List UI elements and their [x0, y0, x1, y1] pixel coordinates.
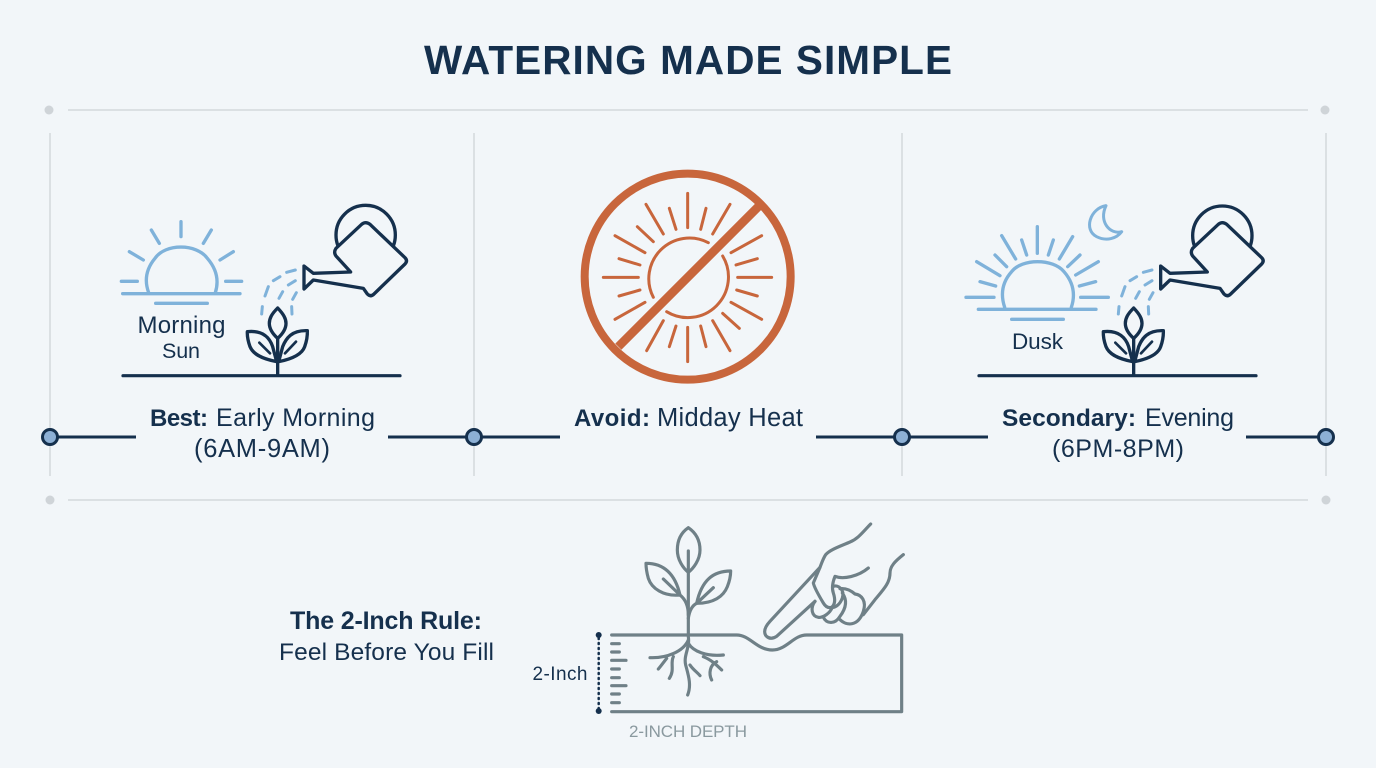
ground line: [979, 374, 1256, 377]
icon: watering can: [304, 205, 406, 296]
heading: 2-inch rule: [279, 607, 494, 666]
text: best time: Early Morning: [216, 404, 375, 432]
icon: crescent moon: [1090, 206, 1122, 239]
label: 2-inch depth: 2-INCH DEPTH: [629, 722, 747, 741]
icon: water droplets: [262, 270, 296, 314]
label: 2-inch: 2-Inch: [532, 664, 588, 685]
text: best time: Best:: [150, 405, 208, 432]
title: WATERING MADE SIMPLE: [424, 37, 952, 83]
icon: seedling: [247, 308, 307, 375]
text: secondary time: Evening: [1145, 404, 1234, 432]
text: avoid: [574, 404, 803, 432]
heading: 2-inch rule: Feel Before You Fill: [279, 639, 494, 666]
timeline connector: [42, 430, 1334, 444]
ruler ticks: [612, 644, 626, 703]
label: morning sun: Morning: [138, 312, 226, 339]
text: best time: (6AM-9AM): [194, 435, 330, 463]
text: best time: [150, 404, 375, 463]
label: morning sun: Sun: [162, 339, 200, 363]
panel: secondary evening: [966, 206, 1263, 463]
text: secondary time: (6PM-8PM): [1052, 435, 1184, 463]
text: secondary time: Secondary:: [1002, 405, 1136, 432]
label: dusk: Dusk: [1012, 329, 1064, 354]
heading: 2-inch rule: The 2-Inch Rule:: [290, 607, 482, 635]
icon: watering can: [1161, 206, 1263, 296]
depth marker: [596, 632, 602, 714]
icon: water droplets: [1118, 270, 1153, 314]
icon: seedling: [1103, 308, 1163, 375]
icon: morning sun: [121, 222, 242, 303]
icon: dusk sun: [966, 227, 1108, 319]
panel: avoid midday heat: [574, 174, 803, 432]
icon: pointing hand: [765, 524, 903, 638]
icon: crossed-out sun: [585, 174, 791, 380]
text: avoid: Avoid:: [574, 405, 650, 432]
label: morning sun: [138, 312, 226, 363]
panel: 2-inch rule: [279, 524, 903, 741]
diagram: soil cross-section: [612, 635, 902, 712]
icon: plant with roots: [646, 528, 731, 695]
text: secondary time: [1002, 404, 1234, 463]
ground line: [123, 374, 400, 377]
panel: best early morning: [121, 205, 406, 463]
text: avoid: Midday Heat: [657, 404, 803, 432]
